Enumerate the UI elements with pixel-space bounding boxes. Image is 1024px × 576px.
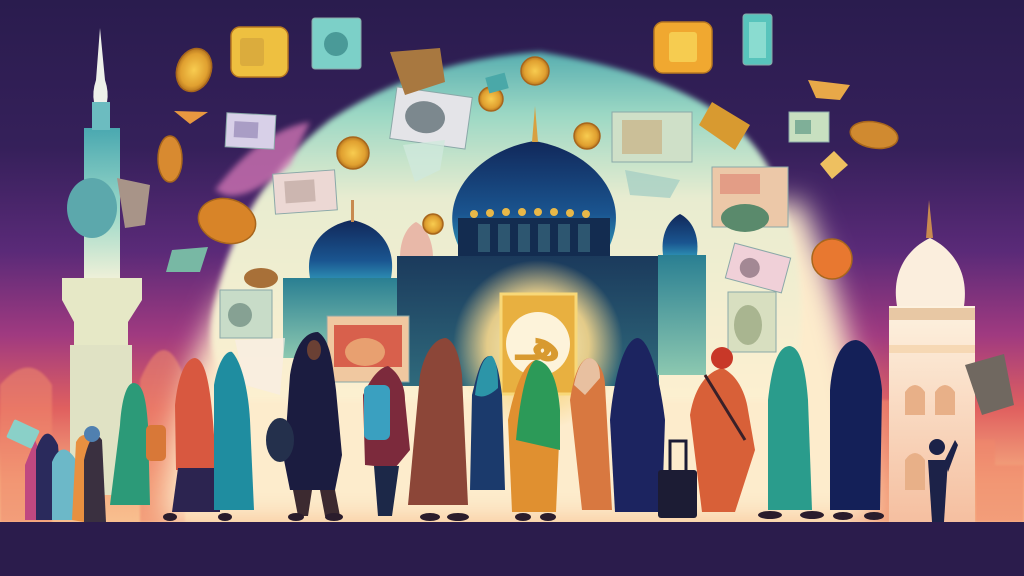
- ground band: [0, 522, 1024, 576]
- minaret lower shaft: [70, 345, 132, 495]
- coin: [479, 87, 503, 111]
- teal scrap: [166, 247, 208, 272]
- pink cloud accent: [215, 122, 310, 196]
- note: [220, 290, 272, 338]
- left dome: [309, 220, 392, 278]
- feet row: [163, 511, 884, 521]
- brown scrap: [244, 268, 278, 288]
- small person with phone: [928, 439, 958, 522]
- gold card: [231, 27, 288, 77]
- scrap: [808, 80, 850, 100]
- left minaret: [62, 28, 142, 495]
- black figure face: [307, 340, 321, 360]
- note: [312, 18, 361, 69]
- right tower bands: [889, 308, 975, 320]
- gold card: [654, 22, 712, 73]
- navy robed figure right: [830, 340, 882, 510]
- grey wallet: [117, 178, 150, 228]
- minaret upper shaft: [84, 128, 120, 278]
- soft lower glow: [165, 200, 875, 522]
- orange bag: [146, 425, 166, 461]
- note: [327, 316, 409, 382]
- central hall: [397, 256, 659, 386]
- right tower dome: [896, 238, 965, 306]
- navy and teal figure: [470, 356, 505, 490]
- scrap: [174, 111, 208, 124]
- dome windows: [478, 224, 590, 252]
- black figure legs: [293, 490, 340, 516]
- backpack figure: [363, 366, 410, 468]
- coin: [812, 239, 852, 279]
- teal small note: [485, 73, 509, 93]
- doorway glow: [453, 260, 623, 430]
- right tower dome: [663, 214, 697, 255]
- mosque complex: [283, 106, 706, 430]
- coin: [193, 192, 261, 250]
- left wing building: [283, 278, 398, 358]
- translucent note: [625, 170, 680, 198]
- teal robed figure right: [768, 346, 812, 510]
- banknotes: [220, 14, 829, 395]
- note: [612, 112, 692, 162]
- glow behind mosque: [165, 52, 875, 522]
- coin: [171, 44, 217, 96]
- coin: [848, 118, 900, 152]
- right tower body: [889, 306, 975, 522]
- minaret spire: [93, 28, 108, 102]
- door emblem: [506, 312, 570, 376]
- gold wallet: [699, 102, 750, 150]
- small pink tower: [400, 222, 433, 285]
- central dome: [452, 141, 616, 245]
- coin: [337, 137, 369, 169]
- green and orange figure: [508, 360, 560, 512]
- note: [273, 170, 337, 214]
- note: [743, 14, 772, 65]
- right wing building: [658, 255, 706, 375]
- left dome spire: [351, 200, 354, 222]
- teal robed figure: [214, 352, 254, 510]
- coin: [521, 57, 549, 85]
- right tower windows: [905, 385, 955, 490]
- red robed figure: [175, 358, 216, 470]
- orange robed figure: [690, 368, 755, 512]
- suitcase: [658, 441, 697, 518]
- floating coins: [158, 44, 900, 279]
- gold cards: [231, 22, 712, 77]
- minaret balcony: [62, 278, 142, 345]
- grey bag: [266, 418, 294, 462]
- distant city skyline: [0, 350, 1024, 522]
- note: [725, 243, 791, 293]
- orange figure scarf: [574, 358, 600, 395]
- small group at left: [6, 419, 106, 522]
- central dome spire: [532, 106, 538, 142]
- gold door panel: [501, 294, 576, 394]
- green robed figure: [110, 383, 150, 505]
- scrap: [820, 151, 848, 179]
- dome drum: [458, 218, 610, 256]
- note: [390, 87, 472, 149]
- brown robed figure: [408, 338, 468, 505]
- coin: [158, 136, 182, 182]
- grey wallet right: [965, 354, 1014, 415]
- minaret bulge: [67, 178, 117, 238]
- translucent note: [403, 140, 445, 182]
- note: [712, 167, 788, 232]
- coin: [423, 214, 443, 234]
- black robed figure: [284, 332, 342, 490]
- gold wallets and scraps: [117, 48, 1014, 415]
- dome of light: [211, 52, 801, 400]
- translucent note: [235, 338, 285, 395]
- orange and cream figure: [570, 358, 612, 510]
- legs of backpack figure: [374, 466, 399, 516]
- note: [789, 112, 829, 142]
- note: [225, 113, 276, 149]
- note: [728, 292, 776, 352]
- right tower: [889, 200, 975, 522]
- crowd of people: [6, 332, 958, 522]
- navy robed figure: [610, 338, 665, 512]
- dome gold dots: [470, 208, 590, 218]
- red turban head: [711, 347, 733, 369]
- brown wallet: [390, 48, 445, 95]
- right tower spire: [926, 200, 933, 238]
- bag strap: [705, 375, 745, 440]
- door emblem script: هـ: [514, 321, 561, 370]
- coin: [574, 123, 600, 149]
